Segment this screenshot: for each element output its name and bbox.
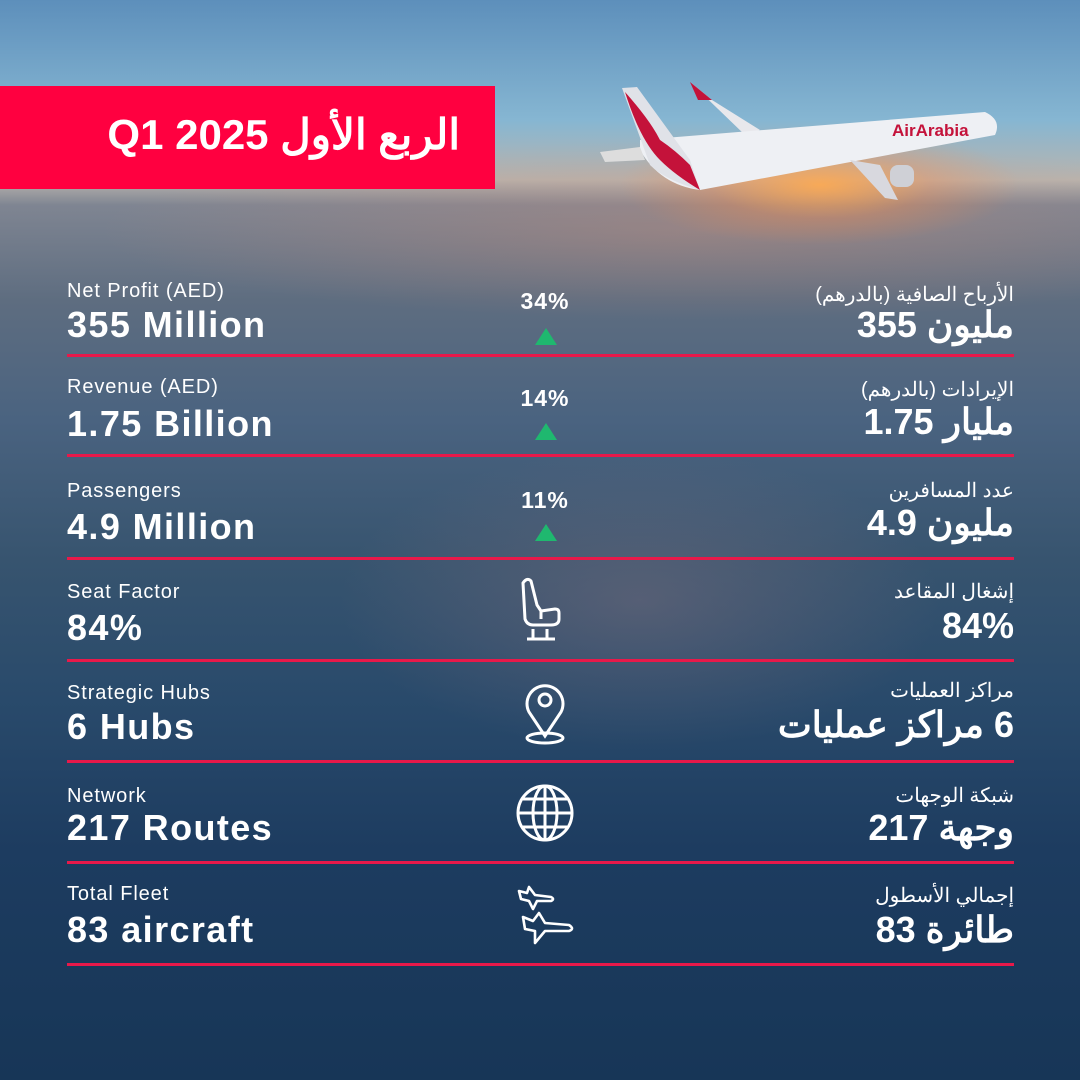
- row: revenue: مليار: [944, 401, 1014, 442]
- row: hubs: مراكز العمليات: [890, 680, 1014, 702]
- icon: globe: [516, 784, 574, 842]
- title banner: الربع الأول Q1 2025: [107, 111, 460, 158]
- row: revenue: [67, 357, 1014, 457]
- row: network: شبكة الوجهات: [895, 785, 1014, 807]
- row: hubs: 6 Hubs: [67, 706, 195, 747]
- row: net profit: 355: [857, 304, 917, 345]
- airplane: AirArabia: [892, 121, 969, 140]
- row: hubs: Strategic Hubs: [67, 682, 211, 704]
- icon: planes: [518, 886, 574, 944]
- title banner: [0, 86, 495, 189]
- row: fleet: [67, 867, 1014, 966]
- row: net profit: مليون: [927, 304, 1014, 345]
- row: fleet: Total Fleet: [67, 883, 169, 905]
- row: network: [67, 765, 1014, 864]
- row: passengers: [67, 460, 1014, 560]
- row: revenue: الإيرادات (بالدرهم): [861, 379, 1014, 401]
- row: hubs: 6: [994, 704, 1014, 745]
- row: net profit: [67, 256, 1014, 357]
- row: seat factor: إشغال المقاعد: [894, 581, 1014, 603]
- row: net profit: 34%: [520, 288, 570, 314]
- row: network: 217 Routes: [67, 807, 273, 848]
- row: revenue: 14%: [520, 385, 570, 411]
- row: seat factor: 84%: [942, 605, 1014, 646]
- row: passengers: مليون: [927, 502, 1014, 543]
- row: revenue: 1.75: [864, 401, 934, 442]
- row: seat factor: 84%: [67, 607, 143, 648]
- row: revenue: Revenue (AED): [67, 376, 219, 398]
- row: fleet: طائرة: [926, 909, 1014, 950]
- icon: seat: [522, 578, 560, 640]
- row: hubs: مراكز عمليات: [778, 704, 984, 745]
- row: passengers: عدد المسافرين: [889, 480, 1014, 502]
- row: seat factor: [67, 561, 1014, 662]
- row: passengers: 4.9: [867, 502, 917, 543]
- row: fleet: 83: [876, 909, 916, 950]
- row: fleet: 83 aircraft: [67, 909, 255, 950]
- airplane: [600, 82, 997, 200]
- row: seat factor: Seat Factor: [67, 581, 180, 603]
- row: net profit: الأرباح الصافية (بالدرهم): [815, 284, 1014, 306]
- row: hubs: [67, 664, 1014, 763]
- row: network: وجهة: [938, 807, 1014, 848]
- row: network: 217: [868, 807, 928, 848]
- icon: location pin: [526, 684, 564, 744]
- row: net profit: Net Profit (AED): [67, 280, 225, 302]
- row: passengers: Passengers: [67, 480, 182, 502]
- row: revenue: 1.75 Billion: [67, 403, 274, 444]
- row: passengers: 4.9 Million: [67, 506, 256, 547]
- row: fleet: إجمالي الأسطول: [875, 885, 1014, 907]
- row: net profit: 355 Million: [67, 304, 266, 345]
- row: passengers: 11%: [521, 487, 569, 513]
- row: network: Network: [67, 785, 147, 807]
